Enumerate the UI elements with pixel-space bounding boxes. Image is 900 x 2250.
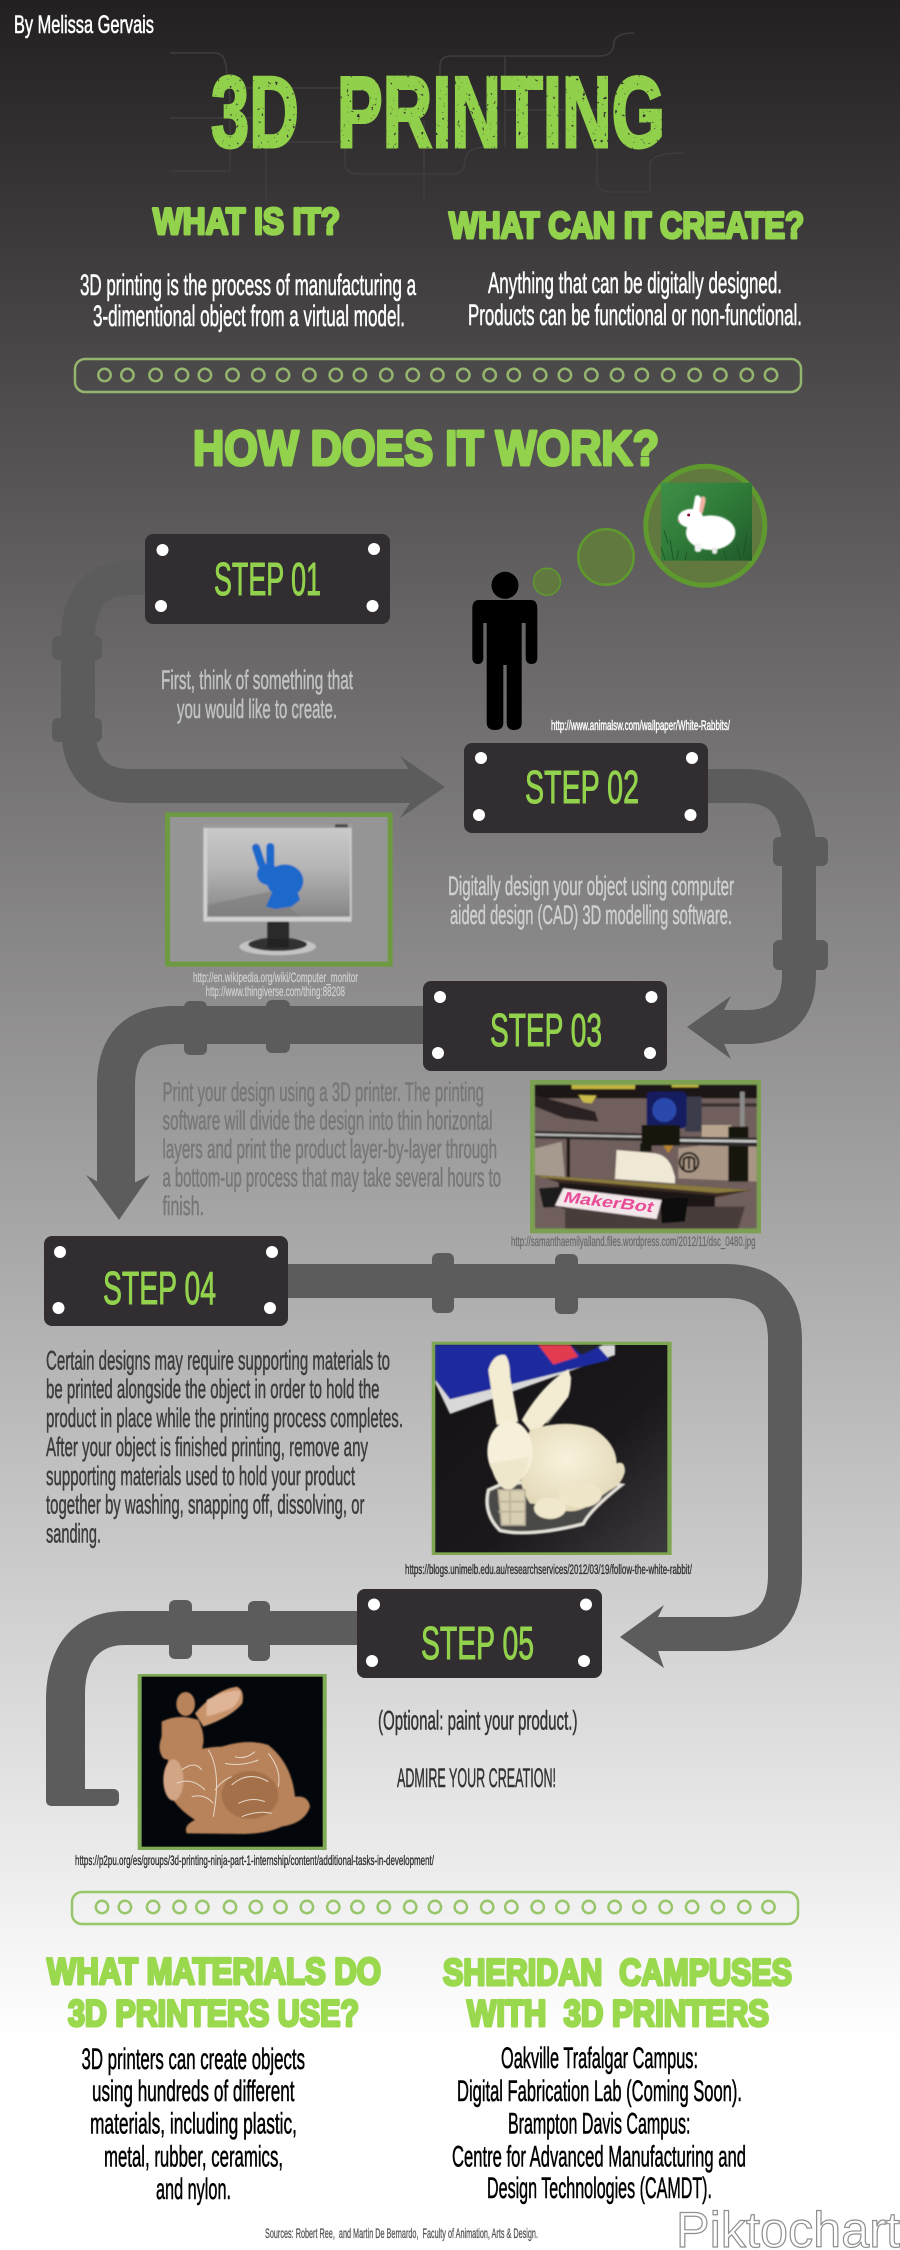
text block: materials: 3D printers can create objects — [82, 2043, 305, 2076]
step 04 plate — [44, 1236, 288, 1326]
thought bubble: large with rabbit photo — [646, 466, 765, 585]
step 05 description: (Optional: paint your product.) — [378, 1706, 578, 1736]
text block: campuses: Design Technologies (CAMDT). — [487, 2172, 712, 2205]
step 01 description — [161, 665, 353, 724]
chain divider bottom — [72, 1892, 798, 1924]
text block: what is it — [80, 269, 416, 333]
step 03 plate — [423, 981, 667, 1071]
heading: sheridan campuses with 3D printers: SHERIDAN CAMPUSES — [443, 1952, 792, 1993]
image: monitor with blue bunny — [165, 812, 393, 967]
step 01 description: First, think of something that — [161, 665, 353, 695]
chain divider top — [75, 359, 801, 392]
heading: what materials do 3D printers use — [47, 1951, 381, 2034]
step 04 description: be printed alongside the object in order to hold the — [46, 1374, 380, 1404]
text block: what is it: 3D printing is the process of manufacturing a — [80, 269, 416, 302]
title: 3D PRINTING — [211, 57, 665, 169]
heading: what is it: WHAT IS IT? — [153, 201, 340, 242]
step 03 description: finish. — [162, 1191, 204, 1221]
step 05 description — [378, 1706, 578, 1793]
image: 3D printer — [530, 1080, 761, 1233]
step 03 plate: STEP 03 — [490, 1004, 602, 1056]
source urls: monitor: http://www.thingiverse.com/thing:88208 — [206, 983, 345, 999]
sources: Sources: Robert Ree, and Martin De Bernardo, Faculty of Animation, Arts & Design. — [265, 2225, 538, 2241]
step 03 description: a bottom-up process that may take several hours to — [162, 1162, 501, 1192]
source url: terracotta bunny: https://p2pu.org/es/groups/3d-printing-ninja-part-1-internship/content/additional-tasks-in-development/ — [75, 1852, 434, 1868]
step 05 plate: STEP 05 — [421, 1617, 534, 1669]
text block: what can it create — [468, 267, 802, 332]
heading: what materials do 3D printers use: WHAT MATERIALS DO — [47, 1951, 381, 1992]
circuit line decoration — [170, 33, 683, 203]
step 02 plate — [464, 743, 708, 833]
step 04 description: sanding. — [46, 1518, 101, 1548]
step 03 description: layers and print the product layer-by-layer through — [162, 1134, 497, 1164]
thought bubble: small — [534, 568, 560, 595]
icon: standing person — [472, 572, 537, 730]
step 05 plate — [357, 1589, 602, 1678]
step 04 plate: STEP 04 — [103, 1262, 216, 1314]
step 03 description: Print your design using a 3D printer. The printing — [162, 1077, 484, 1107]
heading: what can it create: WHAT CAN IT CREATE? — [449, 205, 804, 246]
text block: campuses — [452, 2042, 746, 2205]
text block: campuses: Oakville Trafalgar Campus: — [501, 2042, 698, 2075]
pipe: step 2 to step 3 — [687, 786, 828, 1059]
heading: what materials do 3D printers use: 3D PRINTERS USE? — [68, 1993, 359, 2034]
pipe: step 1 to step 2 — [52, 578, 445, 818]
source urls: monitor: http://en.wikipedia.org/wiki/Computer_monitor — [193, 969, 358, 985]
step 04 description: supporting materials used to hold your product — [46, 1461, 355, 1491]
pipe: step 3 to step 4 — [86, 1000, 430, 1220]
step 01 plate: STEP 01 — [214, 553, 321, 605]
step 03 description — [162, 1077, 501, 1221]
text block: materials: materials, including plastic, — [90, 2108, 297, 2140]
step 04 description: together by washing, snapping off, dissolving, or — [46, 1490, 365, 1520]
step 04 description: Certain designs may require supporting materials to — [46, 1346, 390, 1376]
text block: materials: and nylon. — [156, 2173, 231, 2206]
text block: campuses: Brampton Davis Campus: — [508, 2108, 690, 2140]
text block: materials — [82, 2043, 305, 2206]
text block: materials: metal, rubber, ceramics, — [104, 2140, 283, 2174]
source urls: monitor — [193, 969, 358, 999]
step 02 plate: STEP 02 — [525, 761, 639, 813]
image: printed white bunny with supports — [432, 1342, 672, 1555]
image: painted terracotta bunny — [138, 1674, 327, 1850]
step 04 description — [46, 1346, 403, 1548]
step 01 plate — [145, 534, 390, 624]
thought bubble: medium — [578, 529, 634, 585]
heading: sheridan campuses with 3D printers — [443, 1952, 792, 2034]
pipe: step 5 end — [46, 1600, 360, 1806]
author credit: By Melissa Gervais — [14, 11, 154, 39]
step 05 description: ADMIRE YOUR CREATION! — [397, 1763, 556, 1793]
source url: rabbit: http://www.animalsw.com/wallpaper/White-Rabbits/ — [551, 717, 730, 733]
step 02 description — [448, 871, 734, 930]
step 03 description: software will divide the design into thin horizontal — [162, 1106, 492, 1136]
source url: white bunny: https://blogs.unimelb.edu.au/researchservices/2012/03/19/follow-the-white-rabbit/ — [405, 1561, 692, 1577]
step 04 description: product in place while the printing process completes. — [46, 1403, 403, 1433]
step 04 description: After your object is finished printing, remove any — [46, 1432, 368, 1462]
heading: sheridan campuses with 3D printers: WITH 3D PRINTERS — [467, 1993, 769, 2034]
text block: what is it: 3-dimentional object from a virtual model. — [93, 300, 405, 333]
step 01 description: you would like to create. — [177, 694, 337, 724]
image: 3D printer: MakerBot — [561, 1190, 656, 1216]
heading: how does it work: HOW DOES IT WORK? — [193, 422, 659, 476]
text block: materials: using hundreds of different — [92, 2075, 295, 2108]
pipe: step 4 to step 5 — [280, 1253, 785, 1668]
